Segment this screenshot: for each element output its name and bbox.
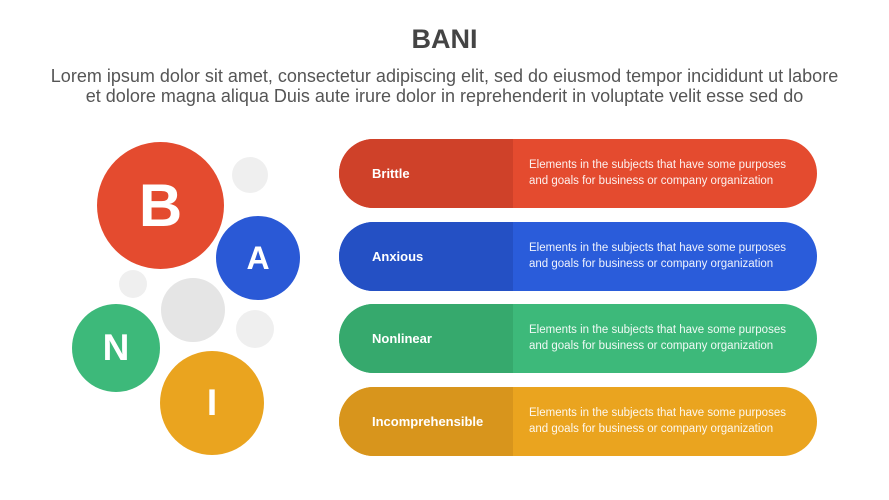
bar: Incomprehensible: Elements in the subjects that have some purposes (529, 407, 786, 419)
circle N (72, 304, 160, 392)
title: BANI (412, 24, 478, 54)
circle cluster (72, 142, 300, 455)
bar: Anxious (339, 222, 817, 291)
circle N: N (103, 327, 129, 368)
bar: Incomprehensible (339, 387, 817, 456)
bar: Brittle: Brittle (372, 166, 410, 181)
bar: Nonlinear: Elements in the subjects that have some purposes (529, 324, 786, 336)
circle B: B (139, 172, 182, 239)
bar: Anxious: and goals for business or company organization (529, 258, 773, 270)
bar: Nonlinear (339, 304, 817, 373)
circle A: A (246, 240, 270, 276)
subtitle: Lorem ipsum dolor sit amet, consectetur adipiscing elit, sed do eiusmod tempor incididunt ut labore (51, 66, 838, 86)
bar: Nonlinear: and goals for business or company organization (529, 340, 773, 352)
subtitle: et dolore magna aliqua Duis aute irure dolor in reprehenderit in voluptate velit esse sed do (86, 86, 803, 106)
grey bubbles (119, 157, 274, 348)
circle B (97, 142, 224, 269)
circle I: I (207, 382, 217, 423)
bar: Anxious: Anxious (372, 249, 423, 264)
bar: Brittle (339, 139, 817, 208)
bar: Incomprehensible: and goals for business or company organization (529, 422, 773, 434)
bar: Brittle: Elements in the subjects that have some purposes (529, 159, 786, 171)
bar: Incomprehensible: Incomprehensible (372, 414, 483, 429)
bar: Anxious: Elements in the subjects that have some purposes (529, 242, 786, 254)
subtitle (51, 66, 838, 106)
bar: Brittle: and goals for business or company organization (529, 174, 773, 186)
bar: Nonlinear: Nonlinear (372, 331, 432, 346)
circle A (216, 216, 300, 300)
circle I (160, 351, 264, 455)
